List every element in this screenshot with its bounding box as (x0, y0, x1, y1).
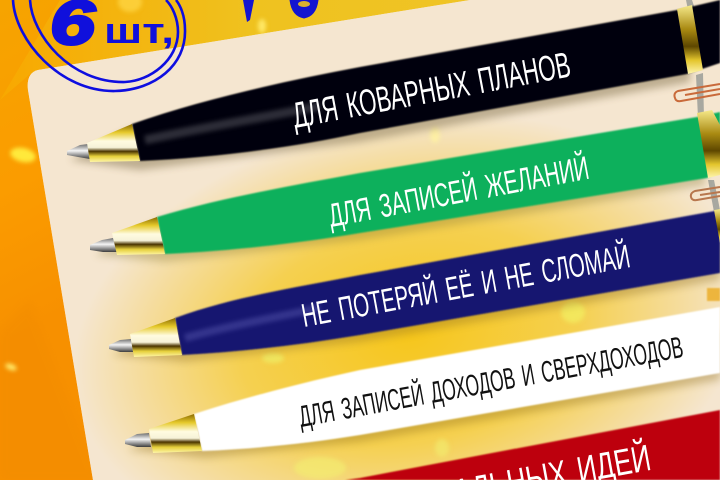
pen: black (67, 0, 720, 170)
pen: navy (109, 209, 720, 362)
pen: red (317, 410, 720, 480)
icon: copper clip 1 (674, 84, 720, 101)
pen: green (90, 110, 720, 262)
icon: copper clip 2 (691, 187, 720, 200)
icon: gold clip (707, 288, 720, 301)
spine and copper clips (674, 0, 720, 301)
hand-drawn stamp: 6 шт (13, 0, 185, 91)
scribbled marks at top (243, 0, 318, 22)
pen: white (125, 307, 720, 458)
handwritten unit: шт, (104, 10, 174, 51)
